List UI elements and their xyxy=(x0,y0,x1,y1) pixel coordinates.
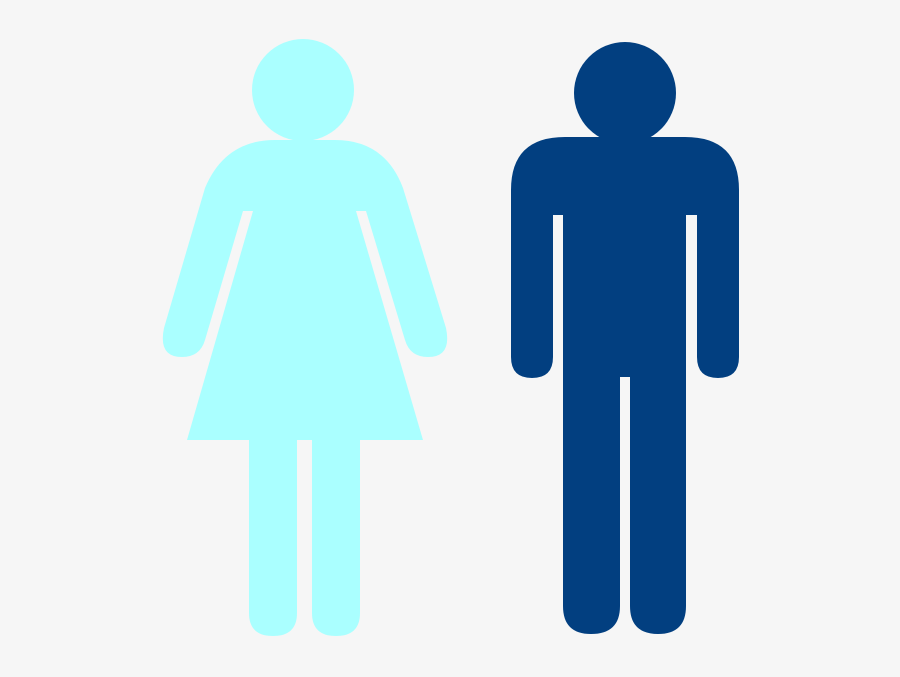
icon: man figure xyxy=(511,42,739,634)
woman head xyxy=(252,39,354,141)
woman body xyxy=(163,140,447,636)
icon: woman figure xyxy=(163,39,447,636)
man head xyxy=(574,42,676,144)
man body xyxy=(511,137,739,634)
